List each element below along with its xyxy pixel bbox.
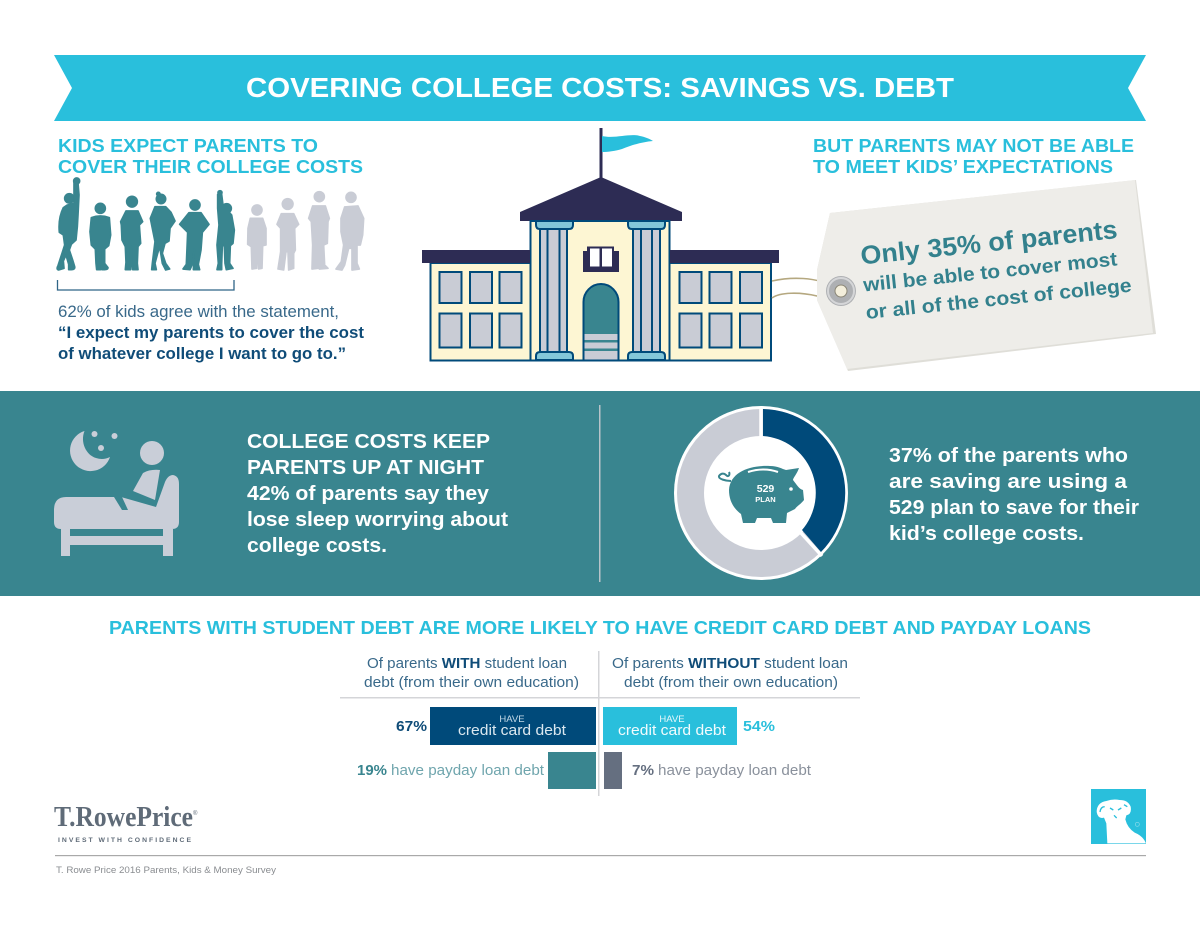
column header: without student loan debt: debt (from their own education) [624,675,838,691]
panel: teal band [0,391,1200,596]
bar: 67% credit card debt [396,707,596,745]
bar: 67% credit card debt: HAVE [499,714,525,725]
bar chart: debt comparison [340,651,860,796]
panel: kids expect parents to cover costs [57,135,365,363]
logo: T. Rowe Price [54,801,198,844]
tag string [772,278,840,298]
bar: 54% credit card debt: 54% [743,718,775,735]
bar: 19% payday loan debt: have payday loan debt [391,762,545,779]
door and steps [584,284,618,360]
heading: kids expect: KIDS EXPECT PARENTS TO [58,135,318,156]
right column [628,221,665,360]
logo: T. Rowe Price: T.RowePrice [54,801,193,833]
column header: with student loan debt [364,656,579,691]
text: lose sleep: PARENTS UP AT NIGHT [247,457,484,479]
text: lose sleep: 42% of parents say they [247,483,490,505]
text: lose sleep: lose sleep worrying about [247,509,508,531]
footer rule [55,855,1146,856]
logo: T. Rowe Price: ® [193,810,198,817]
logo: ram icon [1091,789,1146,844]
heading: kids expect [58,135,363,177]
icon: piggy bank [719,466,804,523]
bar: 67% credit card debt: 67% [396,718,427,735]
tag text: Only 35% of parents [859,214,1119,270]
text: 37% of parents saving: 529 plan to save for their [889,497,1139,519]
column header: with student loan debt: debt (from their own education) [364,675,579,691]
book window [583,246,619,272]
bar: 7% payday loan debt [604,752,812,789]
icon: row of ten kids, six highlighted [57,178,364,270]
panel: parents may not be able [772,135,1156,371]
column header: without student loan debt: Of parents WITHOUT student loan [612,656,848,672]
heading: parents expectations: TO MEET KIDS’ EXPECTATIONS [813,156,1113,177]
text: 62% of kids agree [58,303,365,363]
bar: 54% credit card debt [603,707,775,745]
windows [440,272,762,348]
bar: 19% payday loan debt: 19% [357,762,387,779]
heading: parents expectations [813,135,1134,177]
roof [520,177,682,221]
text: 62% of kids agree: of whatever college I want to go to.” [58,345,346,363]
bracket under highlighted kids [58,280,234,290]
tag text: or all of the cost of college [865,275,1133,324]
bar: 67% credit card debt: credit card debt [458,722,567,739]
heading: student debt comparison: PARENTS WITH STUDENT DEBT ARE MORE LIKELY TO HAVE CREDIT CARD DEBT AND PAYDAY LOANS [109,617,1091,638]
title banner [54,55,1146,121]
illustration: college building [422,128,779,360]
text: 37% of parents saving: kid’s college costs. [889,523,1084,545]
tag eyelet [826,276,856,306]
flag [600,128,653,178]
wings [430,263,771,360]
bar: 7% payday loan debt: have payday loan debt [658,762,812,779]
text: 37% of parents saving: are saving are using a [889,471,1128,493]
wing roofs [422,250,779,263]
callout: price tag [817,180,1156,371]
text: lose sleep [247,431,508,557]
bar: 54% credit card debt: HAVE [659,714,685,725]
bar: 19% payday loan debt [357,752,596,789]
heading: kids expect: COVER THEIR COLLEGE COSTS [58,156,363,177]
column header: with student loan debt: Of parents WITH student loan [367,656,567,672]
logo: T. Rowe Price: INVEST WITH CONFIDENCE [58,837,191,844]
text: 62% of kids agree: 62% of kids agree with the statement, [58,303,339,321]
icon: piggy bank: 529 [757,483,774,495]
bar: 7% payday loan debt: 7% [632,762,654,779]
icon: parent awake in bed under moon [54,431,179,556]
source note: T. Rowe Price 2016 Parents, Kids & Money Survey [56,865,276,876]
text: 37% of parents saving [889,445,1139,545]
heading: parents expectations: BUT PARENTS MAY NOT BE ABLE [813,135,1134,156]
column header: without student loan debt [612,656,848,691]
text: lose sleep: COLLEGE COSTS KEEP [247,431,490,453]
title: COVERING COLLEGE COSTS: SAVINGS VS. DEBT [246,72,954,103]
text: 62% of kids agree: “I expect my parents to cover the cost [58,324,365,342]
icon: piggy bank: PLAN [755,495,776,504]
bar: 54% credit card debt: credit card debt [618,722,727,739]
central block [530,221,670,360]
left column [536,221,573,360]
donut chart: 37% using a 529 plan [674,406,848,580]
text: 37% of parents saving: 37% of the parents who [889,445,1128,467]
tag text [859,214,1133,324]
tag text: will be able to cover most [861,248,1119,297]
text: lose sleep: college costs. [247,535,387,557]
